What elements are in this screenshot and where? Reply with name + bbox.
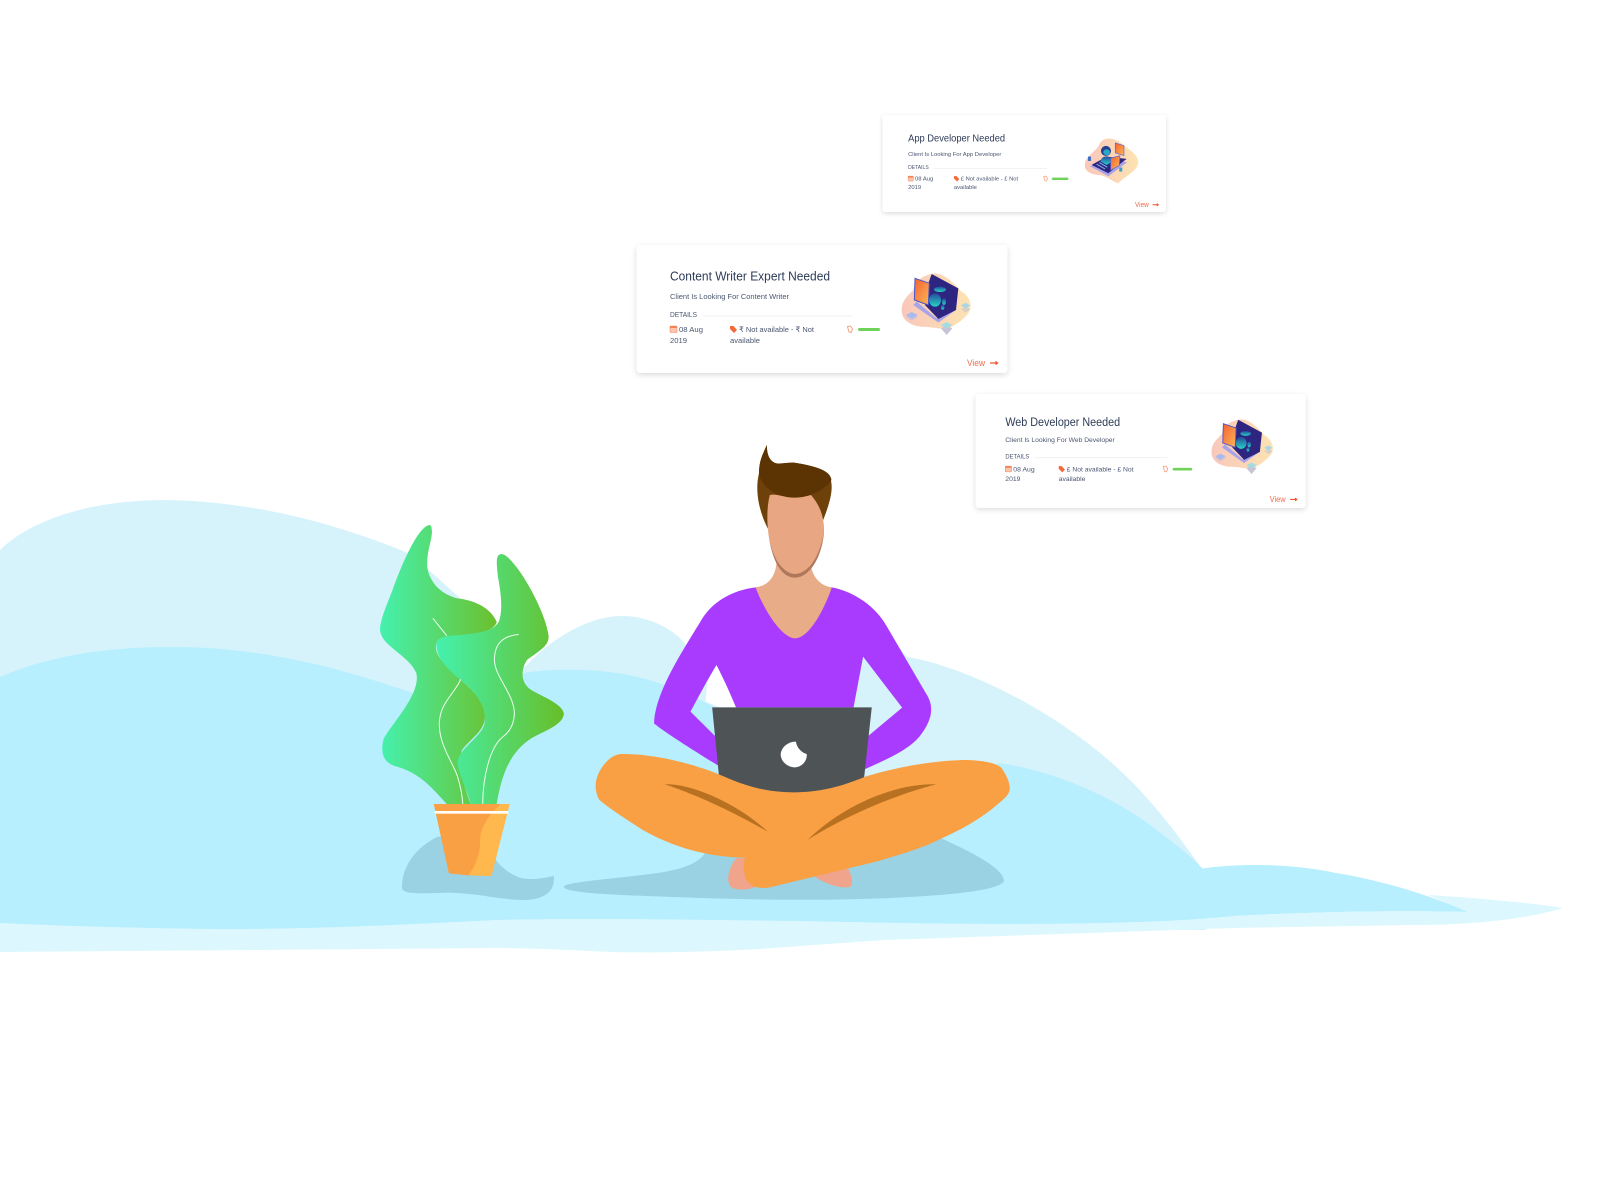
white gap under arm bbox=[706, 665, 737, 707]
back leaf vein top bbox=[433, 618, 447, 636]
card background bbox=[882, 115, 1166, 212]
status bar bbox=[858, 328, 880, 331]
right foot bbox=[813, 868, 852, 887]
left foot bbox=[728, 858, 757, 890]
view arrow bbox=[990, 362, 998, 364]
year: 2019 bbox=[908, 185, 921, 191]
budget: £ Not available - £ Not bbox=[1067, 466, 1134, 473]
card subtitle: Client Is Looking For Web Developer bbox=[1005, 437, 1116, 444]
budget second line: available bbox=[730, 336, 760, 345]
tag icon bbox=[1059, 466, 1065, 472]
card subtitle: Client Is Looking For Content Writer bbox=[670, 292, 790, 301]
card illustration bbox=[1085, 138, 1138, 183]
calendar icon bbox=[670, 326, 677, 332]
plant shadow bbox=[402, 837, 554, 900]
view link: View bbox=[967, 358, 985, 368]
card: app developer bbox=[882, 115, 1166, 212]
card background bbox=[636, 245, 1008, 373]
card title: Content Writer Expert Needed bbox=[670, 268, 830, 284]
person shadow bbox=[564, 838, 1004, 900]
details label: DETAILS bbox=[670, 312, 697, 319]
person bbox=[564, 445, 1010, 900]
status icon bbox=[1163, 466, 1168, 472]
plant bbox=[380, 525, 564, 900]
pot bbox=[434, 804, 510, 876]
card illustration bbox=[1211, 419, 1273, 474]
neck and chest bbox=[756, 563, 832, 638]
calendar icon bbox=[1005, 466, 1012, 472]
calendar icon bbox=[908, 176, 913, 181]
date: 08 Aug bbox=[679, 325, 703, 334]
background: back light hills bbox=[0, 500, 1206, 930]
trousers bbox=[596, 754, 1010, 888]
tag icon bbox=[730, 326, 737, 333]
face bbox=[767, 495, 824, 574]
hair bbox=[757, 445, 832, 528]
card background bbox=[976, 394, 1306, 508]
status bar bbox=[1052, 178, 1069, 180]
laptop bbox=[712, 707, 872, 795]
date: 08 Aug bbox=[1013, 466, 1035, 473]
card: web developer bbox=[976, 394, 1306, 508]
front leaf bbox=[436, 554, 564, 804]
trouser fold right bbox=[808, 784, 936, 840]
budget second line: available bbox=[954, 185, 977, 191]
leaf veins bbox=[439, 634, 519, 804]
status icon bbox=[1044, 176, 1048, 181]
budget: ₹ Not available - ₹ Not bbox=[739, 325, 815, 334]
card illustration bbox=[902, 273, 971, 335]
year: 2019 bbox=[1005, 476, 1021, 483]
details label: DETAILS bbox=[1005, 454, 1029, 461]
status icon bbox=[848, 326, 852, 332]
background: front blue hills bbox=[0, 647, 1468, 929]
year: 2019 bbox=[670, 336, 687, 345]
background: pale ground band bbox=[0, 895, 1563, 952]
shirt bbox=[654, 587, 931, 770]
jaw shadow bbox=[768, 527, 824, 578]
laptop logo bbox=[781, 742, 807, 767]
details label: DETAILS bbox=[908, 165, 929, 171]
card title: App Developer Needed bbox=[908, 134, 1005, 145]
view link: View bbox=[1270, 495, 1286, 504]
trouser fold left bbox=[665, 784, 768, 832]
budget second line: available bbox=[1059, 476, 1086, 483]
view link: View bbox=[1135, 202, 1149, 209]
tag icon bbox=[954, 176, 959, 181]
back leaf bbox=[380, 525, 497, 804]
budget: £ Not available - £ Not bbox=[961, 177, 1019, 183]
status bar bbox=[1173, 468, 1192, 471]
view arrow bbox=[1153, 204, 1158, 206]
card: content writer bbox=[636, 245, 1008, 373]
date: 08 Aug bbox=[915, 177, 933, 183]
view arrow bbox=[1290, 498, 1297, 501]
card subtitle: Client Is Looking For App Developer bbox=[908, 152, 1001, 158]
card title: Web Developer Needed bbox=[1005, 417, 1120, 429]
